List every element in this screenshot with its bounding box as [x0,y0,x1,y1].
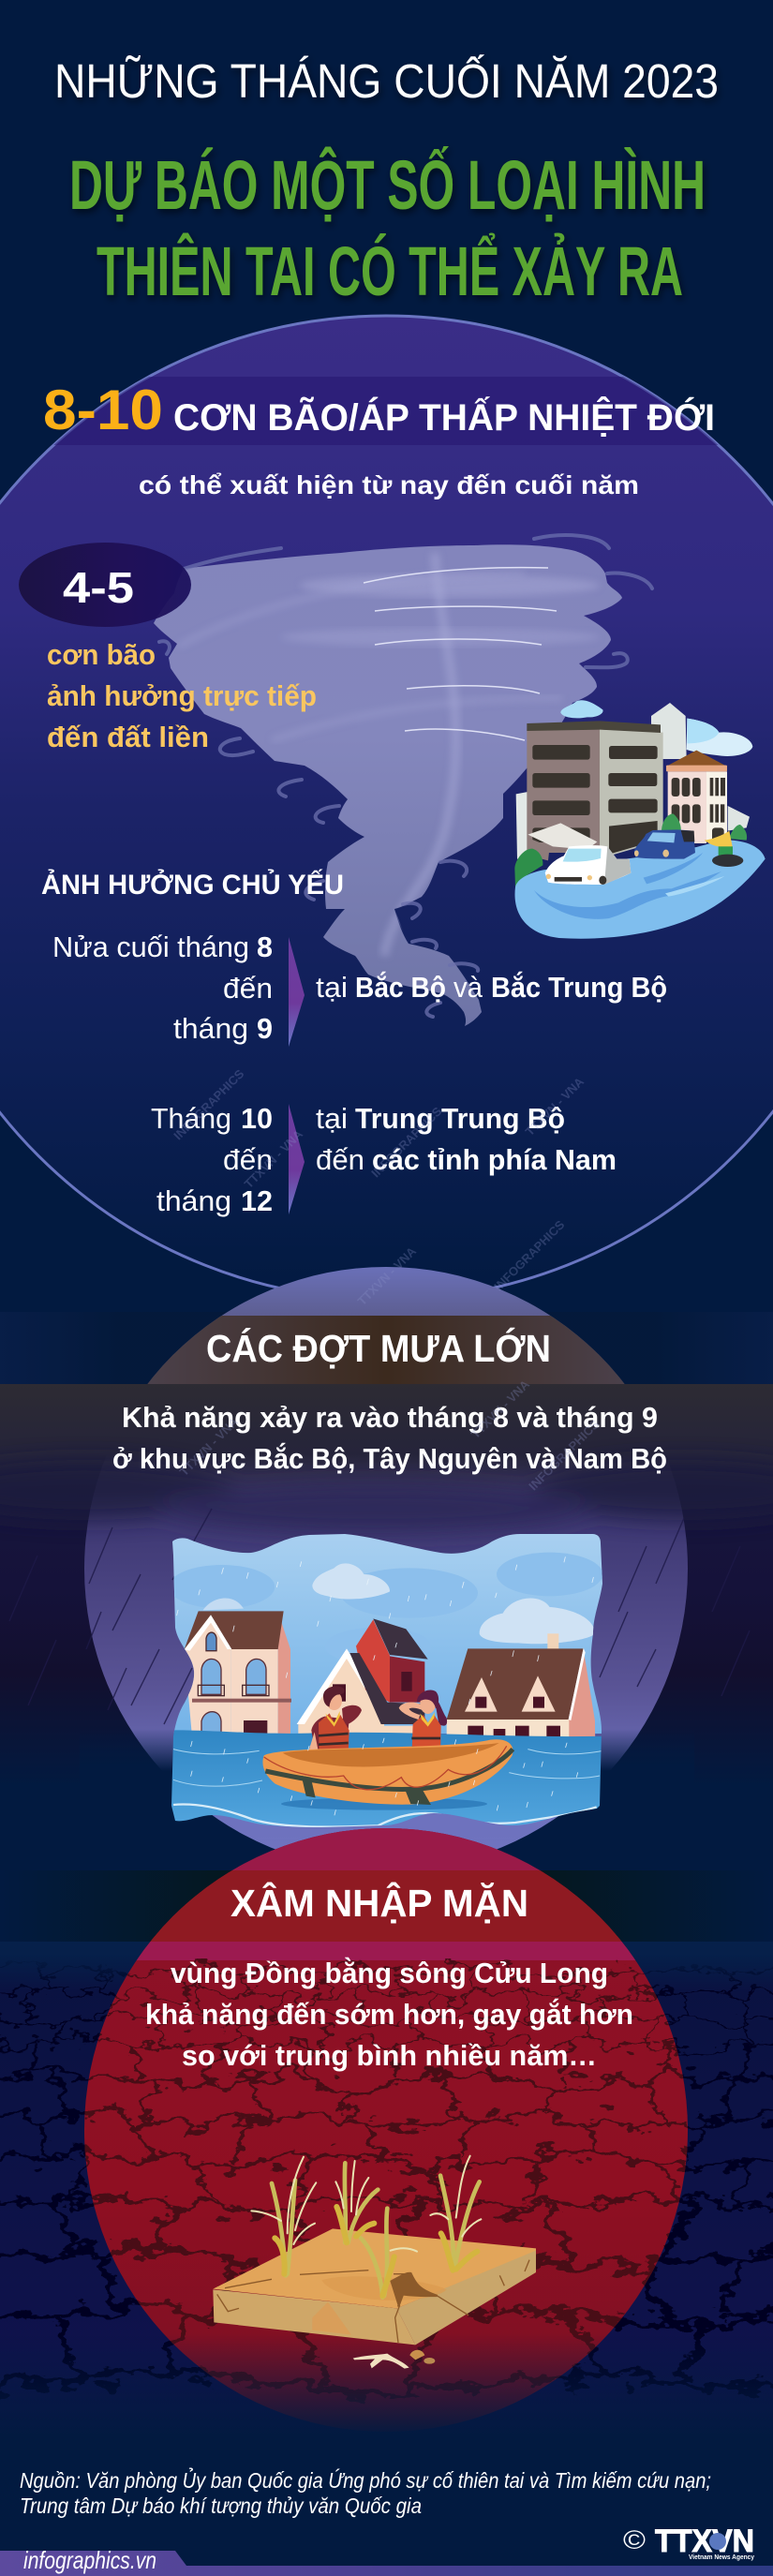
source note [20,2466,711,2518]
sub-heading: CƠN BÃO/ÁP THẤP NHIỆT ĐỚI [173,395,715,439]
timeline row 1: 8 [257,931,273,963]
timeline row 2: đến [223,1143,273,1176]
icon: dry soil block with withered rice [213,2156,536,2369]
watermarks: TTXVN - VNA [177,1414,241,1479]
house left [185,1611,291,1736]
timeline row 1: 9 [257,1012,273,1045]
callout: 4-5 storms: 4-5 [63,563,134,612]
arrow [289,1104,305,1214]
blue car [634,829,695,859]
fade to navy [0,2333,773,2437]
description: ở khu vực Bắc Bộ, Tây Nguyên và Nam Bộ [112,1441,667,1475]
rice plants [251,2156,481,2298]
timeline row 2: đến [316,1143,364,1176]
flood water [171,1730,602,1827]
tornado [154,535,652,1026]
icon: flooded city [514,700,766,939]
callout: 4-5 storms: cơn bão [47,638,156,671]
townhouse [668,771,706,843]
panel: storms circle [0,316,773,1300]
logo: TTXVN [623,2524,754,2561]
soil block [213,2289,415,2345]
heading: XÂM NHẬP MẶN [230,1882,528,1925]
office building [527,728,600,853]
house right [447,1633,595,1738]
logo: TTXVN: Vietnam News Agency [689,2554,754,2561]
wind curls [159,535,652,1017]
heading: main impact: ẢNH HƯỞNG CHỦ YẾU [41,869,344,901]
callout: 4-5 storms [19,543,317,753]
description [145,1956,633,2072]
timeline row 1 [52,931,667,1047]
description: so với trung bình nhiều năm… [182,2039,597,2072]
soil fragments [353,2350,435,2369]
watermarks: INFOGRAPHICS [491,1217,568,1293]
raindrops [177,1557,593,1815]
watermarks: TTXVN - VNA [242,1126,305,1191]
footer bar [0,2546,773,2576]
sub-heading: 8-10 [43,379,163,441]
flood water [515,840,766,939]
watermarks: INFOGRAPHICS [368,1104,445,1180]
person: man [309,1687,362,1750]
timeline row 2: 12 [241,1184,273,1217]
watermarks: INFOGRAPHICS [171,1066,247,1142]
callout: 4-5 storms: ảnh hưởng trực tiếp [47,679,317,712]
description: Khả năng xảy ra vào tháng 8 và tháng 9 [122,1401,658,1434]
description: vùng Đồng bằng sông Cửu Long [171,1956,608,1989]
arrow [289,937,305,1047]
clouds [174,1552,602,1613]
timeline row 1: và [453,971,483,1004]
rescue boat [262,1739,513,1810]
timeline row 1: tháng [173,1012,248,1045]
house centre [297,1618,428,1736]
red circle [84,1828,688,2432]
watermarks [171,1066,602,1493]
person: woman [399,1690,448,1747]
soil cracks [217,2260,529,2343]
timeline row 2: 10 [241,1102,273,1135]
storm sky backdrop [0,1384,773,1787]
timeline row 2: các tỉnh phía Nam [372,1143,617,1176]
description: khả năng đến sớm hơn, gay gắt hơn [145,1997,633,2031]
clouds [560,700,603,718]
timeline row 1: Bắc Trung Bộ [491,970,667,1004]
panel: saltwater intrusion [0,1823,773,2437]
cracked ground backdrop [0,1954,773,2436]
rain streaks [9,1509,750,1724]
heading band [54,377,718,445]
watermarks: TTXVN - VNA [355,1243,419,1308]
timeline row 1: Nửa cuối tháng [52,931,249,963]
timeline row 2 [151,1102,617,1217]
watermarks: INFOGRAPHICS [526,1417,602,1493]
timeline row 2: tháng [156,1184,231,1217]
header title [54,53,719,310]
wind streaks [364,568,557,740]
footer bar: infographics.vn [23,2546,156,2574]
timeline row 1: Bắc Bộ [355,970,446,1004]
callout: 4-5 storms: đến đất liền [47,721,209,753]
sub-heading [43,379,715,441]
sub-heading note: có thể xuất hiện từ nay đến cuối năm [139,470,639,499]
panel: heavy rain [0,1267,773,1870]
timeline row 2: Tháng [151,1102,231,1135]
rescue buoy [705,831,743,867]
logo: TTXVN: TTXVN [655,2524,754,2559]
watermarks: TTXVN - VNA [523,1074,587,1139]
timeline row 2: Trung Trung Bộ [355,1102,565,1135]
watermarks: TTXVN - VNA [468,1377,532,1441]
trees [662,813,681,831]
debris roof [528,823,597,850]
logo: TTXVN: © [623,2525,646,2554]
side fades to navy [80,1729,694,1823]
description [112,1401,667,1475]
heading: CÁC ĐỢT MƯA LỚN [206,1327,551,1370]
illustration: flooded houses and rescue boat [171,1534,602,1827]
timeline row 1: tại [316,971,348,1004]
timeline row 2: tại [316,1102,348,1135]
white pickup [545,845,631,885]
timeline row 1: đến [223,972,273,1005]
title: time frame: NHỮNG THÁNG CUỐI NĂM 2023 [54,53,719,108]
source note: Trung tâm Dự báo khí tượng thủy văn Quốc gia [20,2494,422,2518]
